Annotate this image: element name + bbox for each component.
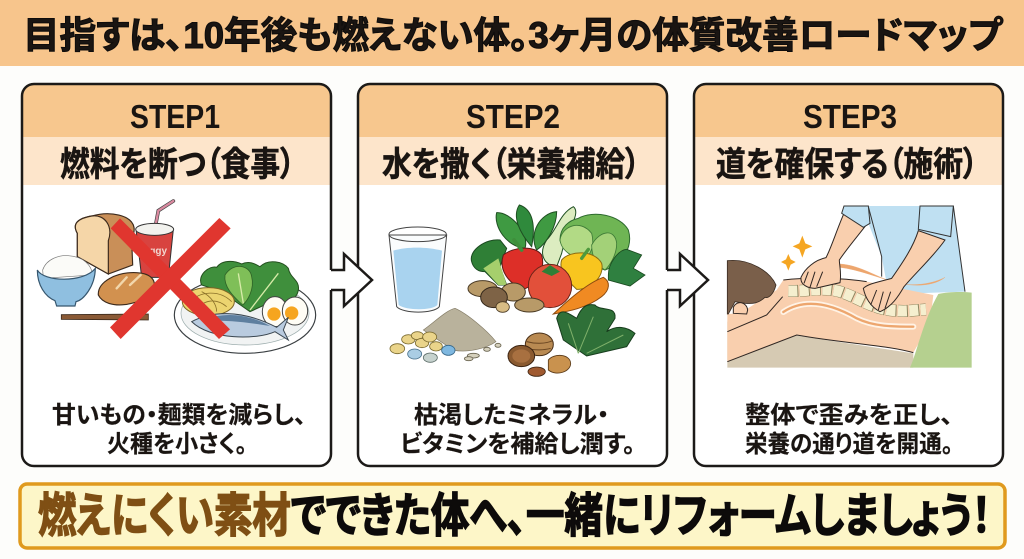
mineral powder bbox=[423, 308, 496, 351]
spinach top right bbox=[608, 249, 645, 286]
cabbage bbox=[560, 214, 630, 270]
rice bowl bbox=[43, 256, 93, 278]
noodles bbox=[182, 288, 234, 316]
arrow: step 2 to 3 bbox=[665, 254, 708, 306]
sleeves bbox=[842, 206, 870, 227]
supplement tablets bbox=[390, 332, 501, 362]
panel: step 3 bbox=[694, 84, 1003, 466]
sparkles bbox=[793, 236, 812, 258]
arrow: step 1 to 2 bbox=[329, 254, 372, 306]
leafy greens bbox=[496, 205, 576, 267]
straw bbox=[155, 201, 173, 228]
right arm and hand bbox=[863, 231, 945, 312]
title banner bbox=[0, 0, 1024, 66]
illustration: spinal treatment bbox=[727, 206, 972, 368]
step 1 heading: STEP1 bbox=[130, 98, 220, 135]
step 3 heading: STEP3 bbox=[803, 98, 897, 135]
illustration: crossed-out food bbox=[37, 201, 316, 353]
fish bbox=[192, 314, 288, 340]
step 3 subheading: 道を確保する（施術） bbox=[716, 146, 978, 184]
step 3 description bbox=[745, 402, 953, 458]
step 2 heading: STEP2 bbox=[466, 98, 560, 135]
panel: step 2 bbox=[358, 84, 667, 466]
step 3 description: 栄養の通り道を開通。 bbox=[745, 431, 953, 458]
water glass bbox=[389, 235, 447, 312]
table bbox=[727, 322, 913, 368]
ear bbox=[733, 303, 748, 314]
step 2 description bbox=[400, 402, 635, 458]
roll bbox=[98, 273, 154, 305]
illustration: water, vegetables and supplements bbox=[389, 205, 645, 376]
step 1 description: 火種を小さく。 bbox=[107, 431, 247, 458]
illustration: crossed-out food: ggy bbox=[149, 246, 168, 257]
panel: step 1 bbox=[22, 84, 331, 466]
towel bbox=[910, 292, 972, 368]
step 2 description: ビタミンを補給し潤す。 bbox=[400, 431, 635, 458]
step 1 description: 甘いもの・麺類を減らし、 bbox=[52, 402, 306, 429]
patient's back bbox=[727, 278, 933, 362]
potatoes bbox=[468, 281, 497, 297]
step 1 description bbox=[52, 402, 306, 458]
step 2 subheading: 水を撒く（栄養補給） bbox=[382, 146, 640, 184]
bread bbox=[75, 214, 134, 274]
left arm and hand bbox=[801, 213, 867, 288]
greens bbox=[201, 261, 299, 312]
red pepper bbox=[502, 248, 543, 289]
tomato bbox=[528, 264, 572, 308]
chopsticks bbox=[61, 314, 148, 320]
spine bbox=[788, 289, 926, 311]
broccoli bbox=[471, 240, 507, 285]
step 2 description: 枯渇したミネラル・ bbox=[414, 402, 609, 429]
practitioner's shirt bbox=[844, 206, 965, 293]
red cross bbox=[111, 218, 230, 339]
patient's hair bbox=[727, 260, 776, 314]
egg bbox=[262, 297, 288, 327]
title banner: 目指すは、10年後も燃えない体。3ヶ月の体質改善ロードマップ bbox=[23, 15, 1004, 56]
cup bbox=[136, 229, 173, 277]
step 3 description: 整体で歪みを正し、 bbox=[745, 402, 953, 429]
energy lines bbox=[783, 304, 913, 327]
plate bbox=[174, 277, 316, 353]
kale bbox=[557, 305, 635, 356]
nuts bbox=[525, 333, 553, 356]
callout banner bbox=[20, 484, 1005, 548]
carrot bbox=[553, 277, 608, 314]
step 1 subheading: 燃料を断つ（食事） bbox=[60, 146, 295, 184]
yellow pepper bbox=[561, 253, 602, 289]
